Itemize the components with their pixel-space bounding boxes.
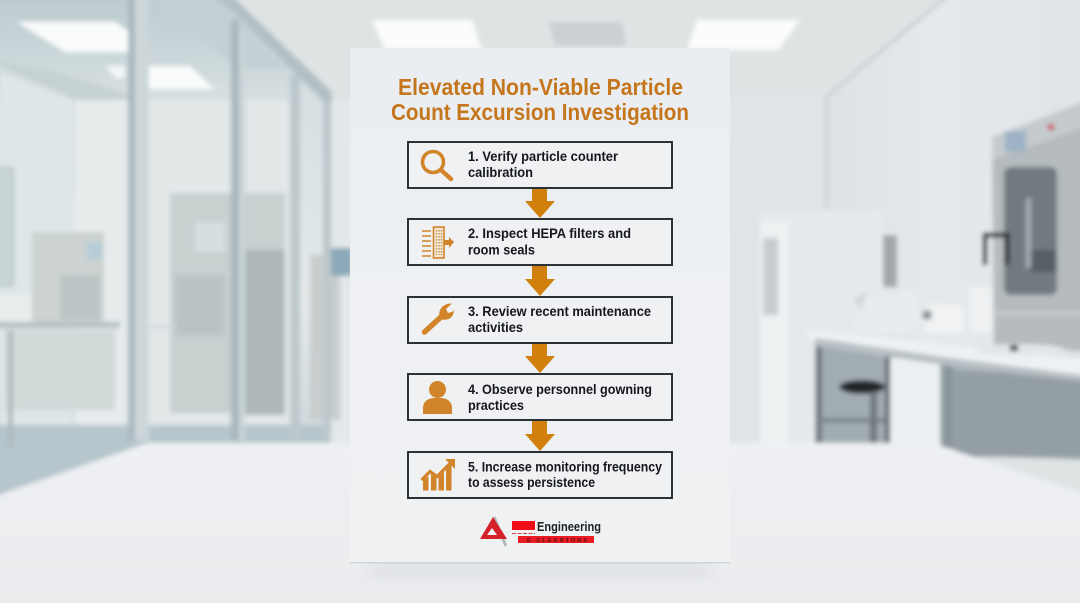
step 3 text: activities — [468, 320, 523, 335]
right wall — [826, 0, 1080, 450]
logo: Engineering — [537, 520, 601, 534]
ceiling lights and vent — [372, 20, 800, 50]
table top — [0, 443, 1080, 603]
icon: magnifying glass — [422, 152, 451, 179]
glass mullions — [128, 0, 135, 440]
fridge — [760, 210, 885, 445]
counter machine — [852, 290, 922, 334]
arrow 1 — [525, 188, 555, 218]
step 5 text: 5. Increase monitoring frequency — [468, 460, 662, 474]
step 5 text — [468, 460, 662, 490]
step 3: review maintenance — [408, 297, 672, 343]
icon: rising chart — [422, 459, 455, 490]
appliance — [992, 100, 1080, 352]
step 5 text: to assess persistence — [468, 475, 595, 490]
step 2: inspect filters — [408, 219, 672, 265]
title — [391, 74, 689, 125]
logo: E CLEANTONS — [527, 538, 587, 544]
step 2 text: room seals — [468, 242, 535, 258]
title: Count Excursion Investigation — [391, 99, 689, 125]
arrow 4 — [525, 420, 555, 451]
counter — [808, 330, 1080, 378]
step 1 text: calibration — [468, 165, 533, 180]
step 1: verify calibration — [408, 142, 672, 188]
under-counter — [815, 340, 1080, 460]
step 1 text: 1. Verify particle counter — [468, 149, 619, 164]
back wall — [330, 100, 830, 450]
step 2 text — [468, 226, 631, 258]
step 4 text: practices — [468, 398, 524, 413]
step 4 text — [468, 382, 652, 413]
step 3 text: 3. Review recent maintenance — [468, 304, 651, 319]
step 5: increase monitoring — [408, 452, 672, 498]
icon: HEPA filter — [422, 227, 454, 258]
card shadow — [370, 562, 710, 578]
title: Elevated Non-Viable Particle — [398, 74, 683, 100]
step 3 text — [468, 304, 651, 335]
logo — [480, 517, 601, 546]
lights in glass — [17, 22, 135, 52]
step 4 text: 4. Observe personnel gowning — [468, 382, 652, 397]
left floor — [0, 425, 330, 500]
panel: report card — [350, 48, 730, 564]
step 1 text — [468, 149, 619, 180]
step 4: observe gowning — [408, 374, 672, 420]
icon: person — [423, 381, 452, 414]
left glass wall — [0, 0, 330, 510]
arrow 3 — [525, 343, 555, 373]
left equipment — [0, 168, 13, 286]
icon: wrench — [424, 303, 454, 332]
step 2 text: 2. Inspect HEPA filters and — [468, 226, 631, 241]
arrow 2 — [525, 265, 555, 296]
